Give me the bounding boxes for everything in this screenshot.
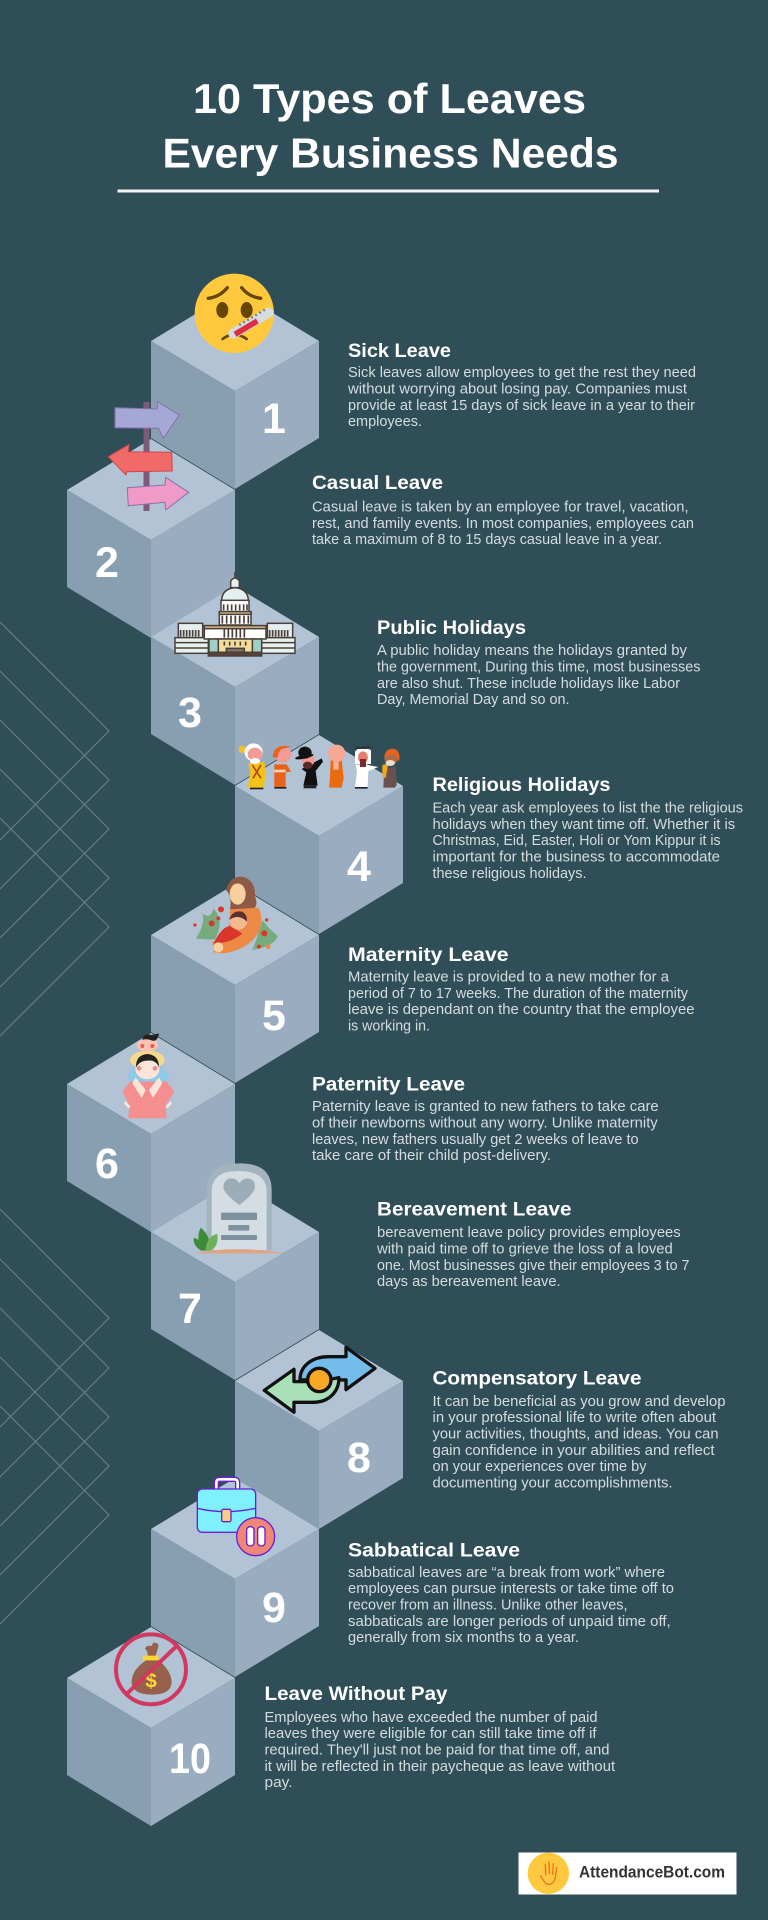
number 5: 5 [262, 992, 286, 1040]
icon: crossed-out money bag [116, 1634, 186, 1704]
text: bereavement leave: bereavement leave policy provides employees [377, 1225, 681, 1241]
text: paternity leave: Paternity leave is granted to new fathers to take care [312, 1099, 659, 1115]
cube 5 [151, 884, 319, 1083]
text: religious holidays: Christmas, Eid, Easter, Holi or Yom Kippur it is [432, 833, 720, 849]
number 10: 10 [169, 1735, 211, 1783]
heading: compensatory leave: Compensatory Leave [432, 1369, 642, 1390]
text: maternity leave: leave is dependant on the country that the employee [348, 1002, 695, 1018]
text: sick leave [347, 365, 696, 430]
text: religious holidays: holidays when they want time off. Whether it is [432, 817, 735, 833]
text: bereavement leave: days as bereavement leave. [377, 1274, 561, 1290]
heading: sick leave: Sick Leave [348, 341, 451, 362]
heading: casual leave: Casual Leave [312, 473, 443, 494]
step 9: sabbatical leave [151, 1478, 674, 1677]
text: compensatory leave: gain confidence in your abilities and reflect [432, 1443, 714, 1459]
text: paternity leave: of their newborns without any worry. Unlike maternity [312, 1116, 658, 1132]
text: paternity leave [312, 1099, 659, 1164]
number 6: 6 [95, 1140, 119, 1188]
number 3: 3 [178, 689, 202, 737]
logo: AttendanceBot.com [518, 1852, 736, 1894]
text: compensatory leave: It can be beneficial as you grow and develop [432, 1394, 726, 1410]
cube 2 [67, 439, 235, 638]
icon: briefcase with pause [197, 1479, 275, 1556]
text: leave without pay: required. They'll just not be paid for that time off, and [264, 1742, 610, 1758]
title: Every Business Needs [162, 130, 618, 176]
text: sabbatical leave: generally from six months to a year. [348, 1630, 579, 1646]
text: compensatory leave: on your experiences over time by [432, 1459, 647, 1475]
text: leave without pay: it will be reflected in their paycheque as leave without [264, 1759, 615, 1775]
icon: sick face with thermometer [195, 274, 274, 353]
icon: exchange arrows [264, 1347, 375, 1412]
text: sick leave: provide at least 15 days of sick leave in a year to their [348, 398, 695, 414]
logo: AttendanceBot.com: AttendanceBot.com [579, 1864, 725, 1882]
text: casual leave: take a maximum of 8 to 15 days casual leave in a year. [312, 532, 662, 548]
cube 6 [67, 1033, 235, 1232]
text: bereavement leave: with paid time off to grieve the loss of a loved [376, 1242, 673, 1258]
cube 4 [235, 735, 403, 934]
step 2: casual leave [67, 402, 694, 638]
number 4: 4 [347, 843, 371, 891]
text: sabbatical leave: sabbatical leaves are “a break from work” where [348, 1565, 665, 1581]
text: sabbatical leave [348, 1565, 674, 1646]
icon: mother holding child [193, 877, 278, 953]
text: leave without pay: pay. [264, 1775, 292, 1791]
icon: signpost [108, 402, 189, 511]
text: religious holidays: Each year ask employees to list the the religious [432, 800, 743, 816]
text: public holidays: the government, During this time, most businesses [377, 660, 700, 676]
title: 10 Types of Leaves [193, 75, 586, 122]
text: casual leave [312, 500, 694, 548]
text: leave without pay: leaves they were eligible for can still take time off if [264, 1726, 597, 1742]
title underline [118, 190, 659, 192]
text: religious holidays [432, 800, 743, 882]
cube 8 [235, 1330, 403, 1529]
step 1: sick leave [151, 274, 696, 489]
text: sick leave: without worrying about losing pay. Companies must [347, 382, 687, 398]
text: leave without pay: Employees who have exceeded the number of paid [264, 1710, 598, 1726]
text: compensatory leave [432, 1394, 726, 1492]
icon: hand on yellow circle [528, 1853, 569, 1894]
heading: public holidays: Public Holidays [377, 618, 526, 639]
icon: tombstone [194, 1163, 284, 1253]
cube 1 [151, 290, 319, 489]
text: religious holidays: important for the business to accommodate [432, 850, 720, 866]
text: compensatory leave: in your professional life to write often about [432, 1410, 716, 1426]
text: paternity leave: take care of their child post-delivery. [312, 1148, 551, 1164]
step 4: religious holidays [235, 735, 743, 934]
number 7: 7 [178, 1285, 202, 1333]
text: religious holidays: these religious holidays. [432, 866, 586, 882]
text: bereavement leave [376, 1225, 690, 1290]
step 7: bereavement leave [151, 1163, 690, 1380]
step 3: public holidays [151, 572, 700, 785]
icon: crossed-out money bag: $ [145, 1669, 157, 1692]
heading: maternity leave: Maternity Leave [348, 945, 509, 966]
step 10: leave without pay [67, 1627, 615, 1826]
title [162, 75, 618, 176]
cube 3 [151, 586, 319, 785]
number 1: 1 [262, 395, 286, 443]
text: maternity leave: is working in. [348, 1018, 430, 1034]
heading: bereavement leave: Bereavement Leave [377, 1200, 572, 1221]
text: leave without pay [264, 1710, 615, 1791]
text: paternity leave: leaves, new fathers usually get 2 weeks of leave to [312, 1132, 639, 1148]
text: compensatory leave: your activities, thoughts, and ideas. You can [432, 1426, 718, 1442]
cube 10 [67, 1627, 235, 1826]
text: casual leave: Casual leave is taken by an employee for travel, vacation, [312, 500, 689, 516]
text: sabbatical leave: sabbaticals are longer periods of unpaid time off, [348, 1614, 671, 1630]
text: sabbatical leave: recover from an illness. Unlike other leaves, [348, 1598, 628, 1614]
cube 7 [151, 1181, 319, 1380]
text: public holidays: Day, Memorial Day and so on. [377, 692, 570, 708]
step 6: paternity leave [67, 1033, 659, 1232]
text: sick leave: employees. [348, 414, 422, 430]
text: public holidays: are also shut. These include holidays like Labor [377, 676, 680, 692]
number 8: 8 [347, 1434, 371, 1482]
text: public holidays [377, 643, 700, 708]
icon: people of different religions [239, 743, 399, 789]
heading: leave without pay: Leave Without Pay [264, 1684, 448, 1705]
cube 9 [151, 1478, 319, 1677]
icon: capitol building [175, 572, 295, 656]
text: bereavement leave: one. Most businesses give their employees 3 to 7 [377, 1258, 690, 1274]
text: casual leave: rest, and family events. In most companies, employees can [312, 516, 694, 532]
text: compensatory leave: documenting your accomplishments. [432, 1476, 672, 1492]
text: sabbatical leave: employees can pursue interests or take time off to [348, 1581, 674, 1597]
step 8: compensatory leave [235, 1330, 726, 1529]
text: sick leave: Sick leaves allow employees to get the rest they need [348, 365, 696, 381]
text: maternity leave: Maternity leave is provided to a new mother for a [348, 970, 670, 986]
text: maternity leave [348, 970, 695, 1034]
text: public holidays: A public holiday means the holidays granted by [377, 643, 688, 659]
number 2: 2 [95, 539, 119, 587]
heading: sabbatical leave: Sabbatical Leave [348, 1540, 520, 1561]
heading: religious holidays: Religious Holidays [432, 775, 610, 796]
step 5: maternity leave [151, 877, 695, 1083]
icon: father with child on shoulders [122, 1033, 174, 1118]
number 9: 9 [262, 1584, 286, 1632]
text: maternity leave: period of 7 to 17 weeks. The duration of the maternity [348, 986, 689, 1002]
heading: paternity leave: Paternity Leave [312, 1075, 465, 1096]
